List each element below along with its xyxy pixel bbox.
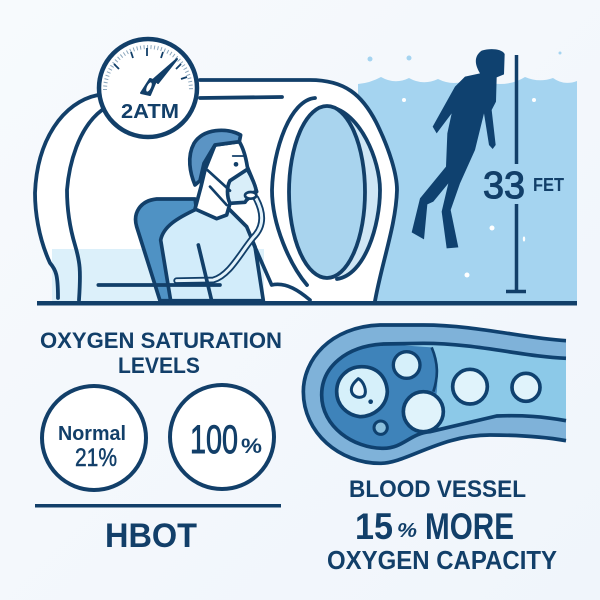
blood vessel caption: 15 — [355, 506, 393, 547]
heading: oxygen saturation levels: OXYGEN SATURATION — [40, 328, 282, 353]
normal 21% circle: Normal — [58, 423, 126, 445]
patient with oxygen mask — [98, 130, 310, 301]
HBOT label: HBOT — [105, 517, 197, 555]
water tank — [358, 52, 577, 303]
hair — [190, 130, 241, 185]
oxygen tube — [177, 198, 262, 281]
gauge ticks — [105, 47, 191, 90]
gauge needle — [141, 59, 177, 95]
floor line — [37, 301, 577, 306]
hyperbaric chamber — [35, 80, 397, 303]
normal 21% circle — [42, 386, 146, 490]
oxygen cells — [337, 367, 387, 417]
divider — [35, 504, 281, 508]
normal 21% circle: 21% — [75, 444, 117, 472]
blood vessel caption: % — [397, 520, 417, 542]
seat — [136, 199, 197, 301]
HBOT 100% circle: % — [241, 435, 262, 458]
neck and face — [195, 142, 257, 219]
heading: oxygen saturation levels — [40, 328, 282, 378]
HBOT 100% circle — [170, 385, 274, 489]
blood vessel — [303, 325, 566, 463]
heading: oxygen saturation levels: LEVELS — [118, 353, 200, 378]
depth marker: FET — [533, 175, 564, 195]
mask — [227, 169, 256, 203]
vessel wall — [303, 325, 566, 463]
gauge label: 2ATM — [121, 101, 179, 123]
vessel lumen — [322, 343, 566, 448]
blood vessel caption — [327, 476, 557, 575]
depth marker — [483, 55, 564, 292]
blood vessel caption: OXYGEN CAPACITY — [327, 545, 557, 575]
HBOT 100% circle: 100 — [190, 418, 238, 462]
depth label: 33 — [483, 165, 525, 207]
blood vessel caption: BLOOD VESSEL — [349, 476, 526, 503]
blood vessel caption: MORE — [425, 506, 514, 547]
pressure gauge — [99, 39, 197, 137]
diver silhouette — [412, 49, 505, 248]
shirt — [161, 207, 263, 301]
